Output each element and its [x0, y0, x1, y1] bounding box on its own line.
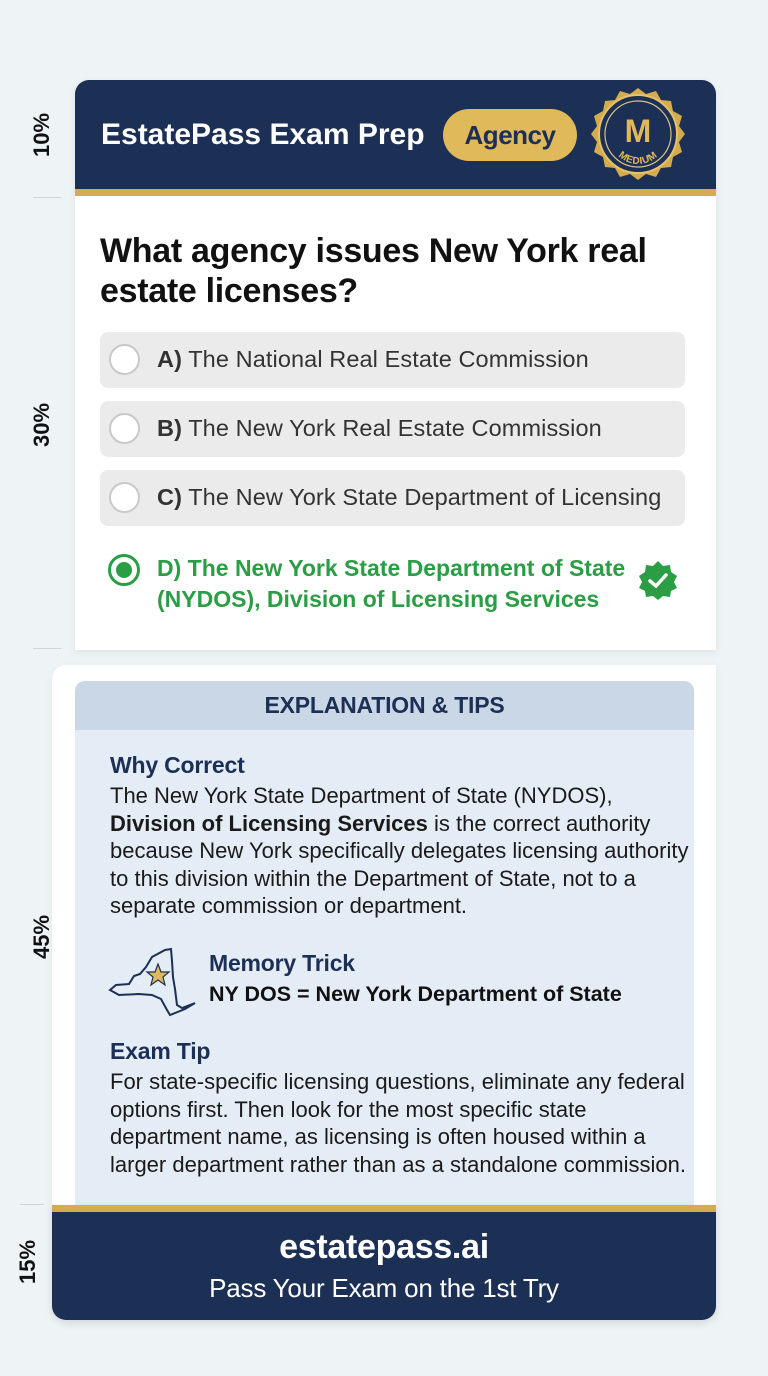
footer site name: estatepass.ai: [279, 1228, 489, 1266]
option A: [100, 332, 685, 388]
exam tip: Exam Tip: [110, 1038, 210, 1064]
memory trick: Memory Trick: [209, 950, 355, 976]
why correct: separate commission or department.: [110, 893, 467, 918]
option D correct: (NYDOS), Division of Licensing Services: [157, 586, 599, 612]
why correct: Division of Licensing Services is the correct authority: [110, 810, 650, 836]
option B: [100, 401, 685, 457]
why correct: because New York specifically delegates licensing authority: [110, 838, 688, 863]
category pill: Agency: [465, 120, 555, 150]
title: EstatePass Exam Prep: [101, 118, 425, 151]
exam tip: department name, as licensing is often housed within a: [110, 1124, 646, 1149]
option C: [100, 470, 685, 526]
explanation container: [52, 665, 716, 1210]
option C: C) The New York State Department of Licensing: [157, 484, 661, 510]
side label 45%: 45%: [29, 915, 54, 959]
memory trick: NY DOS = New York Department of State: [209, 982, 622, 1006]
side label 15%: 15%: [15, 1240, 40, 1284]
icon: medium badge: MEDIUM: [618, 150, 657, 164]
side label 30%: 30%: [29, 403, 54, 447]
why correct: to this division within the Department of State, not to a: [110, 866, 636, 890]
panel heading: [75, 681, 694, 730]
exam tip: For state-specific licensing questions, eliminate any federal: [110, 1069, 685, 1094]
explanation panel: [75, 681, 694, 1206]
exam tip: [110, 1038, 686, 1176]
question: What agency issues New York real: [100, 232, 647, 270]
footer: [52, 1205, 716, 1320]
header bar: [75, 80, 716, 196]
icon: medium badge: M: [625, 113, 651, 149]
icon: check badge: [639, 561, 677, 600]
exam tip: larger department rather than as a standalone commission.: [110, 1152, 686, 1176]
exam tip: options first. Then look for the most specific state: [110, 1096, 586, 1122]
memory trick: [209, 950, 622, 1006]
why correct: The New York State Department of State (NYDOS),: [110, 783, 613, 808]
why correct: [110, 752, 688, 918]
icon: New York state map: [108, 948, 196, 1016]
footer tagline: Pass Your Exam on the 1st Try: [209, 1273, 559, 1303]
category pill: [443, 109, 577, 161]
icon: medium badge: [591, 88, 685, 180]
question: estate licenses?: [100, 272, 358, 310]
option A: A) The National Real Estate Commission: [157, 346, 589, 372]
side label 10%: 10%: [29, 113, 54, 157]
question card: [75, 80, 716, 650]
option B: B) The New York Real Estate Commission: [157, 415, 602, 441]
option D correct: [108, 554, 677, 612]
option D correct: D) The New York State Department of State: [157, 555, 625, 581]
question: [100, 232, 647, 310]
panel heading: EXPLANATION & TIPS: [264, 692, 505, 718]
why correct: Why Correct: [110, 752, 245, 778]
